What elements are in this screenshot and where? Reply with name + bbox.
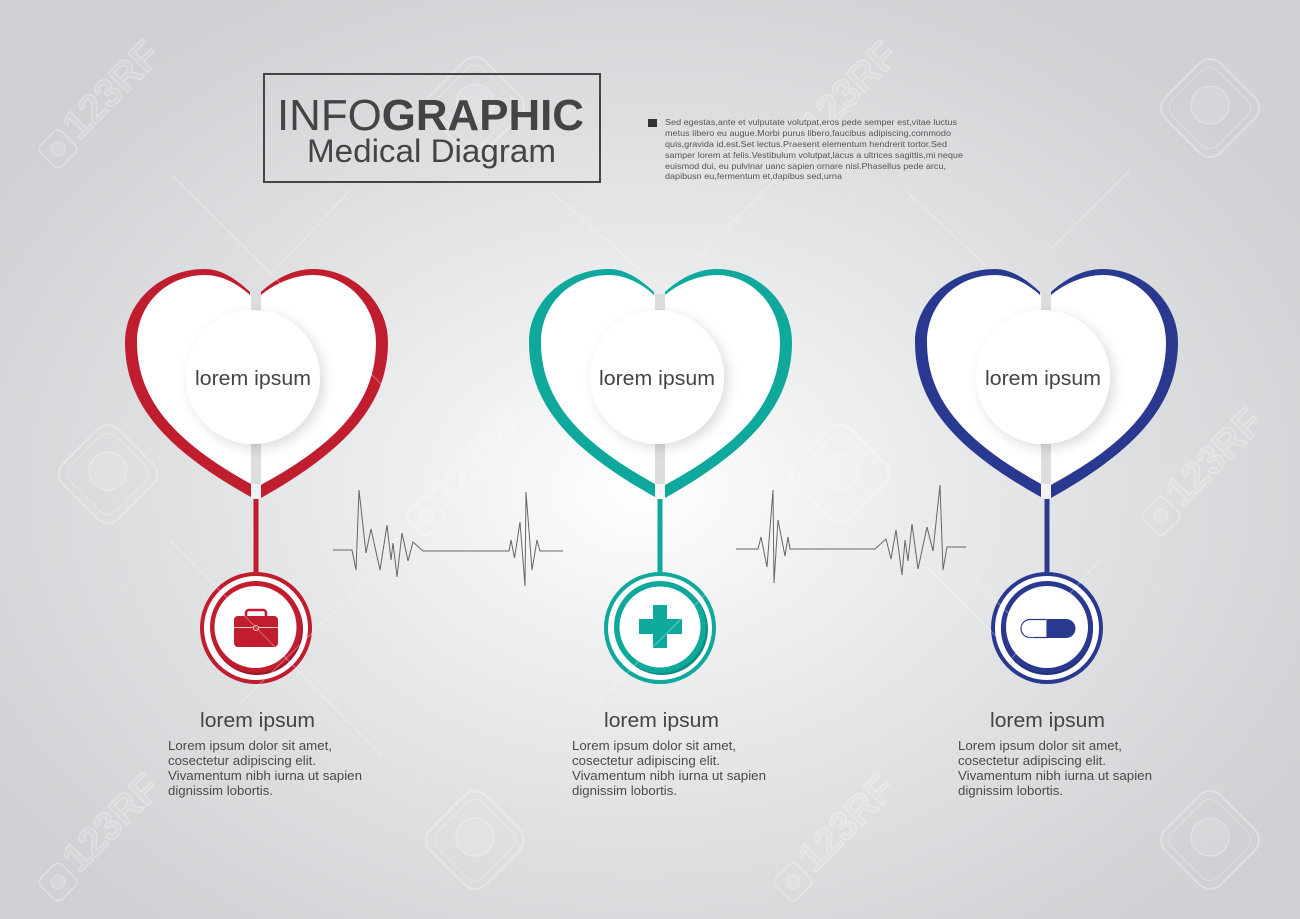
connector: blue stem (1044, 499, 1050, 574)
column text: teal: Lorem ipsum dolor sit amet, (572, 739, 736, 753)
intro paragraph (665, 117, 963, 181)
subtitle: Medical Diagram: Medical Diagram (307, 133, 556, 169)
connector: red stem (254, 499, 258, 574)
column text: teal: Vivamentum nibh iurna ut sapien (572, 769, 766, 783)
panel: blue heart: lorem ipsum (985, 367, 1101, 390)
column text: red: dignissim lobortis. (168, 784, 273, 798)
panel: red heart: lorem ipsum (195, 367, 311, 390)
column text: red: cosectetur adipiscing elit. (168, 754, 316, 768)
panel: blue heart (915, 269, 1178, 498)
watermark pattern: 123RF (54, 766, 169, 880)
column text: blue (958, 709, 1152, 798)
title box (264, 74, 600, 182)
column text: blue: lorem ipsum (990, 709, 1105, 732)
column text: teal (572, 709, 766, 798)
icon ring: red briefcase (202, 574, 310, 682)
title: Infographic: INFOGRAPHIC (277, 91, 584, 140)
watermark pattern: 123RF (1157, 400, 1272, 514)
column text: teal: cosectetur adipiscing elit. (572, 754, 720, 768)
connector: teal stem (658, 499, 662, 574)
column text: red: Vivamentum nibh iurna ut sapien (168, 769, 362, 783)
panel: teal heart (529, 269, 792, 498)
intro bullet (648, 119, 657, 127)
intro paragraph: dapibusn eu,fermentum et,dapibus sed,urna (665, 171, 842, 181)
icon: capsule (1021, 619, 1076, 638)
panel: red heart (125, 269, 388, 498)
column text: blue: Vivamentum nibh iurna ut sapien (958, 769, 1152, 783)
column text: teal: dignissim lobortis. (572, 784, 677, 798)
watermark pattern: 123RF (789, 766, 904, 880)
intro paragraph: Sed egestas,ante et vulputate volutpat,eros pede semper est,vitae luctus (665, 117, 957, 127)
intro paragraph: metus libero eu augue.Morbi purus libero,faucibus adipiscing,commodo (665, 128, 951, 138)
panel: teal heart: lorem ipsum (599, 367, 715, 390)
column text: red: Lorem ipsum dolor sit amet, (168, 739, 332, 753)
intro paragraph: quis,gravida id,est.Set lectus.Praesent elementum hendrerit tortor.Sed (665, 139, 947, 149)
watermark pattern: 123RF (54, 33, 169, 147)
heartbeat line: left (333, 490, 563, 586)
intro paragraph: samper lorem at felis.Vestibulum volutpat,lacus a ultrices sagittis,mi neque (665, 150, 963, 160)
column text: blue: Lorem ipsum dolor sit amet, (958, 739, 1122, 753)
icon ring: blue capsule (993, 574, 1101, 682)
column text: red (168, 709, 362, 798)
heartbeat line: right (736, 485, 966, 583)
column text: blue: cosectetur adipiscing elit. (958, 754, 1106, 768)
column text: teal: lorem ipsum (604, 709, 719, 732)
column text: red: lorem ipsum (200, 709, 315, 732)
icon: briefcase (234, 610, 278, 647)
column text: blue: dignissim lobortis. (958, 784, 1063, 798)
icon ring: teal cross (606, 574, 714, 682)
intro paragraph: euismod dui, eu pulvinar uanc sapien ornare nisl.Phasellus pede arcu, (665, 161, 946, 171)
watermark pattern: 123RF (422, 400, 537, 514)
watermark pattern: 123RF (792, 33, 907, 147)
icon: medical cross (639, 605, 682, 648)
